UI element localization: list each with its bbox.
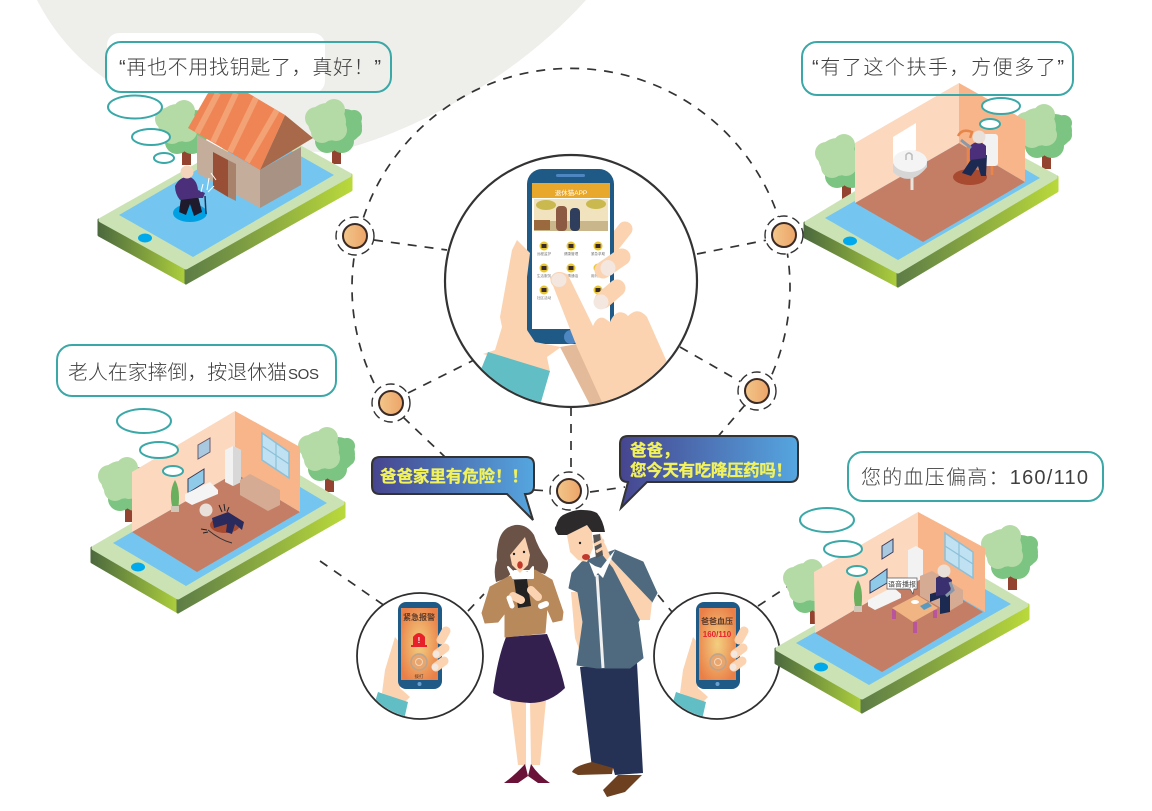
voice alert tag: 语音播报 [888, 580, 916, 588]
old man with cane [173, 166, 216, 222]
phone base [92, 453, 344, 612]
main circle: hands using the app [445, 155, 697, 410]
background grey blob [37, 0, 586, 168]
right pointing hand [550, 257, 675, 410]
tree left [98, 457, 155, 522]
hands and phone [509, 579, 546, 608]
node: lower left [372, 384, 410, 422]
scene: bathroom on phone [805, 83, 1072, 286]
emergency phone [398, 602, 442, 689]
phone base [99, 128, 351, 283]
left holding hand [481, 240, 560, 402]
skirt [493, 634, 565, 703]
speech bubble: danger [372, 457, 534, 520]
node: upper right [765, 216, 803, 254]
fingers [730, 631, 744, 670]
tree right [305, 99, 362, 164]
speech bubble: SOS: SOS [288, 366, 319, 383]
left small circle: emergency alert phone [357, 593, 483, 720]
dashed network connecting nodes [320, 68, 790, 612]
thought bubbles [980, 98, 1020, 129]
face and collar [508, 537, 533, 578]
emergency phone: 紧急报警 [403, 612, 435, 622]
phone base [776, 556, 1028, 712]
head and hair [555, 510, 615, 578]
emergency phone: ! [418, 636, 420, 645]
fingers [432, 631, 446, 670]
emergency phone: 拨打 [414, 673, 424, 680]
speech bubble: danger: 爸爸家里有危险！！ [380, 466, 528, 486]
shirt [569, 550, 657, 668]
app icon grid: 用药提醒 [591, 273, 606, 278]
blood pressure phone: 爸爸血压 [701, 616, 733, 626]
seated man with handrail [953, 130, 998, 185]
sink and mirror [893, 123, 927, 190]
speech bubble: SOS: 老人在家摔倒，按退休猫 [68, 361, 287, 384]
coffee table [892, 595, 938, 633]
blood pressure phone: 160/110 [703, 630, 732, 639]
hair [495, 525, 548, 582]
tree right [981, 525, 1038, 590]
room walls and floor [855, 83, 1025, 242]
app phone: 退休猫APP [555, 188, 587, 197]
speech bubble: blood pressure: 您的血压偏高：160/110 [861, 466, 1088, 489]
node: bottom centre [550, 472, 588, 510]
speech bubble: blood pressure [848, 452, 1103, 501]
scene: blood pressure in living room [776, 508, 1038, 712]
house [188, 93, 313, 208]
tree left [155, 100, 212, 165]
speech bubble: keys: “再也不用找钥匙了，真好！” [119, 56, 381, 79]
speech bubble: medicine: 您今天有吃降压药吗！ [630, 460, 792, 480]
app icon grid: 社区活动 [537, 295, 552, 300]
scene: house on phone [99, 93, 362, 283]
window [262, 433, 289, 478]
tree left [783, 559, 840, 624]
scene: fall in living room [92, 409, 355, 612]
room walls and floor [132, 411, 300, 572]
tree right [1015, 104, 1072, 169]
speech bubble: handrail: “有了这个扶手，方便多了” [812, 56, 1064, 79]
shoes [572, 762, 642, 797]
app icon grid: 远程监护 [537, 251, 552, 256]
app phone [527, 169, 614, 344]
voice alert tag [887, 578, 917, 594]
tree left [815, 134, 872, 199]
blood pressure phone [696, 602, 740, 689]
phone base [805, 128, 1057, 286]
node: upper left [336, 217, 374, 255]
app icon grid [537, 242, 606, 300]
furniture [171, 438, 280, 512]
app icon grid: 生活服务 [537, 273, 552, 278]
legs and shoes [504, 700, 550, 783]
left arm [571, 592, 583, 652]
woman with phone [482, 525, 565, 783]
thought bubbles [800, 508, 867, 576]
fallen old man [200, 504, 244, 543]
speech bubble: medicine: 爸爸， [630, 441, 680, 460]
speech bubble: keys [106, 42, 391, 92]
right arm [592, 533, 652, 620]
thought bubbles [117, 409, 183, 476]
hand and sleeve [374, 637, 410, 720]
furniture [854, 539, 963, 612]
speech bubble: SOS [57, 345, 336, 396]
node: lower right [738, 372, 776, 410]
room walls and floor [814, 512, 985, 672]
window [945, 533, 973, 578]
app icon grid: 健康管理 [564, 251, 579, 256]
man on phone [555, 510, 657, 797]
jacket [482, 570, 563, 637]
app icon grid: 亲情通话 [564, 273, 579, 278]
hand and sleeve [672, 637, 708, 720]
tree right [298, 427, 355, 492]
seated old man [930, 564, 953, 614]
fingers behind phone [610, 229, 625, 248]
right small circle: blood pressure phone [654, 593, 780, 720]
trousers [580, 663, 643, 775]
speech bubble: handrail [802, 42, 1073, 95]
speech bubble: medicine [620, 436, 798, 508]
app icon grid: 紧急求助 [591, 251, 606, 256]
thought bubbles [108, 96, 174, 163]
